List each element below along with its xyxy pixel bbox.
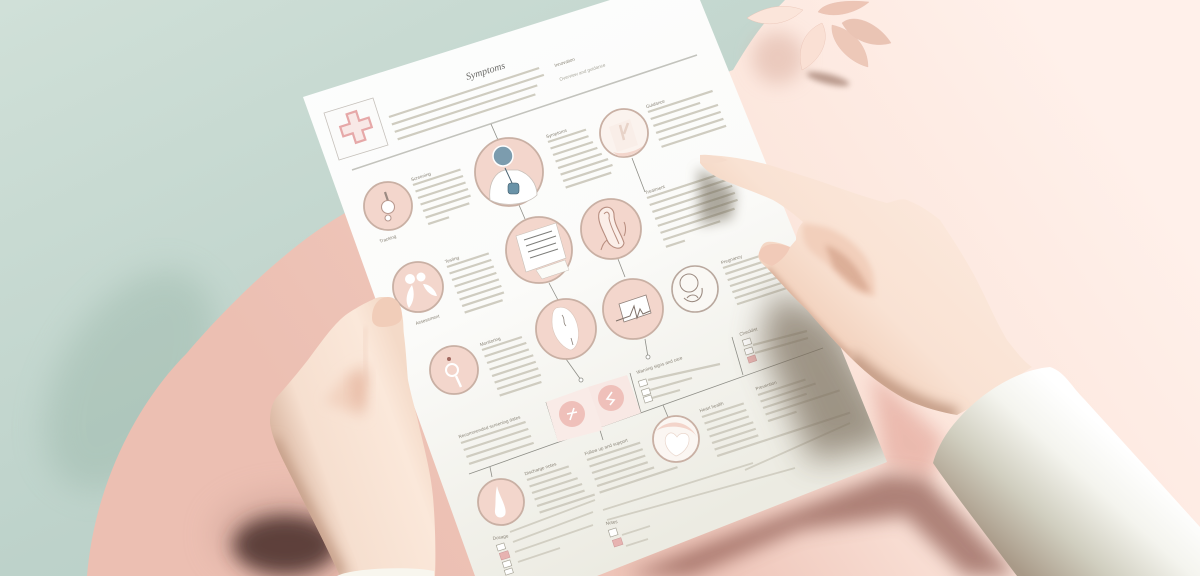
checklist: bottom left: Dosage — [492, 533, 509, 541]
hollow between fingers and thumb — [328, 365, 366, 416]
checklist: upper right: Checklist — [739, 326, 759, 337]
icon: bean organ — [536, 299, 596, 359]
icon: decorative leaf sprig — [747, 1, 891, 70]
text block: top right — [645, 83, 726, 147]
text block: heart — [699, 365, 850, 456]
long lines at bottom — [510, 423, 850, 562]
icon: baby outline — [672, 266, 718, 312]
text block: lower left of tiles: Recommended screening dates — [458, 414, 522, 439]
text block: left instrument: Screening — [410, 171, 432, 182]
caption under paired forms: Assessment — [415, 313, 441, 326]
icon: hand card — [600, 109, 648, 157]
icon: droplet — [478, 479, 524, 525]
text block: middle lower — [584, 426, 678, 493]
text block: paired forms — [444, 246, 506, 313]
header divider — [352, 55, 697, 170]
text block: right of heart: Prevention — [755, 380, 778, 391]
text block: middle lower: Follow up and support — [584, 437, 629, 456]
text block: ring: Monitoring — [479, 336, 502, 347]
text block: baby — [720, 243, 790, 304]
text block: lower left of tiles — [458, 414, 534, 464]
shirt cuff under hand — [337, 568, 434, 576]
white coat sleeve — [933, 367, 1200, 576]
icon: ribbon — [581, 199, 641, 259]
left hand holding the sheet — [270, 297, 435, 576]
text block: pointed paragraph: Treatment — [644, 184, 666, 195]
text block: pointed paragraph — [644, 165, 746, 247]
thumb nail — [372, 297, 402, 327]
text block: right of heart — [755, 362, 842, 421]
checklist: bottom left — [492, 533, 513, 575]
thumb nail — [759, 244, 790, 266]
header side text: Overview and guidance — [559, 62, 606, 82]
text block: left instrument — [410, 162, 476, 224]
checklist: above divider — [636, 355, 720, 403]
checklist: bottom middle — [605, 519, 623, 547]
logo box with red cross — [324, 98, 388, 160]
header side text: Innovation — [554, 57, 576, 68]
icon tiles — [546, 375, 641, 442]
text block: droplet: Discharge notes — [524, 461, 558, 476]
icon: heart — [653, 416, 699, 462]
text block: ring — [479, 328, 543, 396]
palm hollow between finger and thumb — [802, 223, 875, 297]
text block: paired forms: Testing — [444, 255, 460, 264]
text block: doctor — [545, 118, 615, 188]
text block: baby: Pregnancy — [720, 254, 743, 265]
shadows cast on the paper — [698, 168, 900, 462]
checklist: above divider: Warning signs and care — [636, 355, 683, 375]
checklist: bottom middle: Notes — [605, 519, 619, 526]
pointer nail — [700, 155, 728, 163]
caption under left instrument: Tracking — [379, 234, 397, 244]
shadows on the table — [215, 32, 1017, 576]
icon: document — [506, 217, 572, 283]
text block: heart: Heart health — [699, 401, 725, 413]
header paragraph — [389, 67, 550, 139]
paper sheet — [303, 0, 887, 576]
checklist: upper right — [739, 326, 808, 363]
text block: top right: Guidance — [645, 98, 666, 109]
header side text — [554, 57, 606, 82]
connector lines — [469, 124, 823, 477]
paper content — [324, 55, 850, 575]
title: Symptoms — [465, 60, 507, 83]
icon: paired forms — [393, 262, 443, 312]
icon: instrument — [364, 182, 412, 230]
icon: doctor with stethoscope — [475, 138, 543, 206]
right hand pointing — [700, 155, 1032, 415]
text block: doctor: Symptoms — [545, 128, 568, 139]
text block: droplet — [524, 454, 595, 513]
icon: ring tool — [430, 346, 478, 394]
soft shadow on wall along the table edge — [9, 241, 251, 519]
icon: heartbeat monitor — [603, 279, 663, 339]
